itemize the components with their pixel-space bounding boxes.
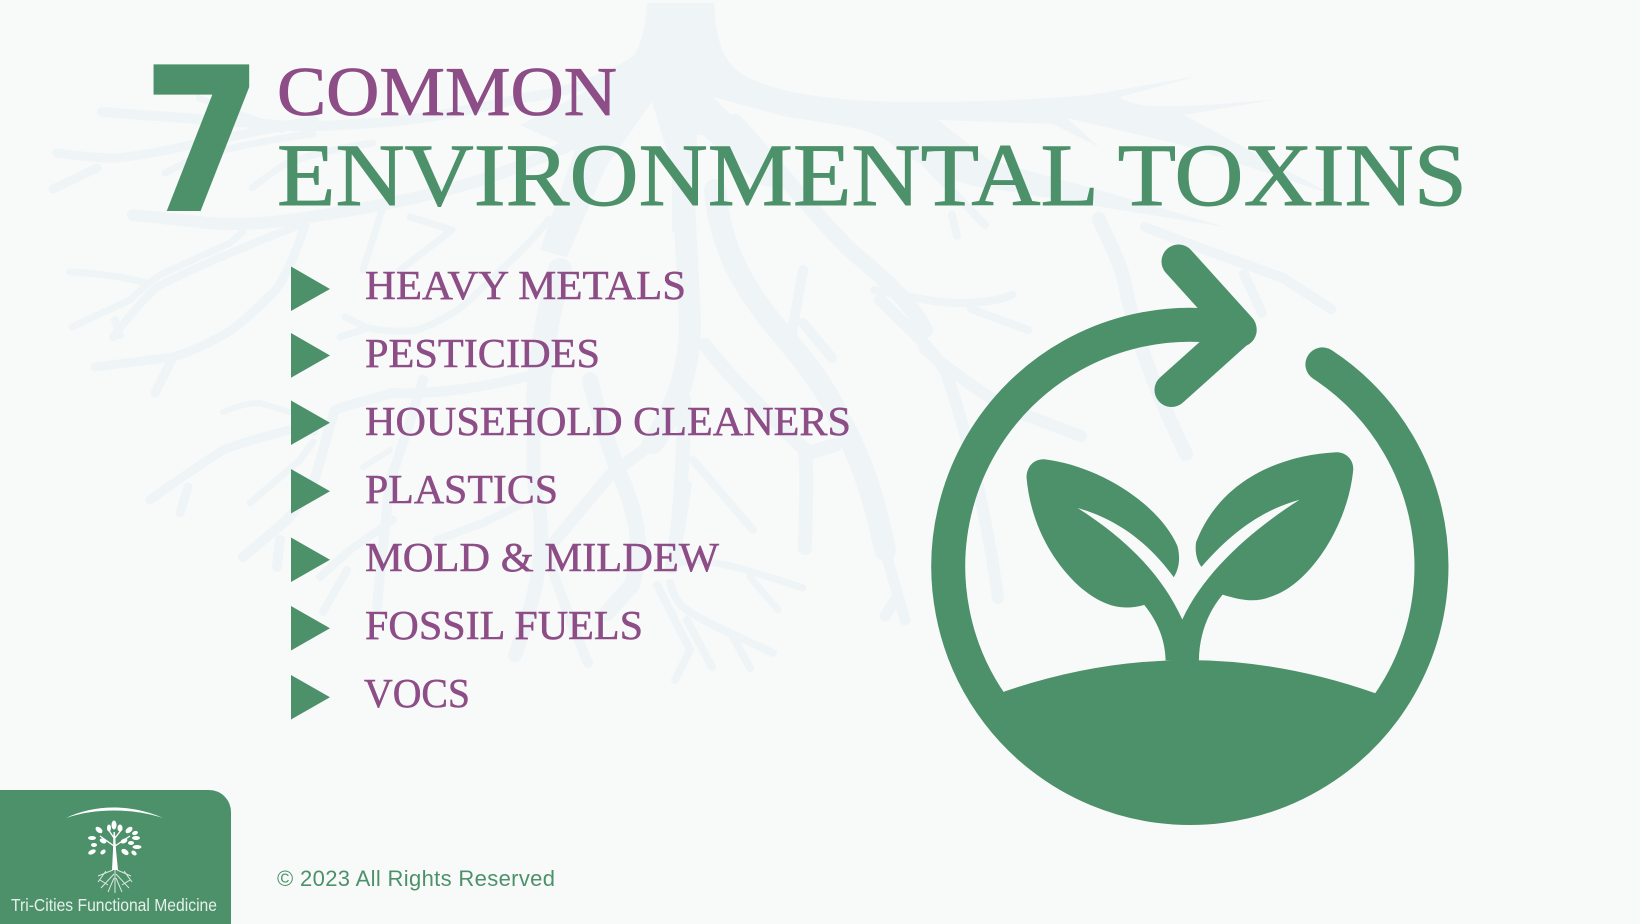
bullet: pesticides [291,333,330,378]
circular arrow ring [948,325,1431,808]
bullet: household cleaners [291,400,330,445]
left leaf and stem [1026,459,1199,661]
logo tree [87,820,142,870]
bullet: heavy metals [291,266,330,311]
logo background [0,790,231,924]
item: pesticides: PESTICIDES [365,330,600,376]
arrow head [1172,262,1240,390]
logo roots [98,869,132,893]
bullet: vocs [291,675,330,720]
item: mold and mildew: MOLD & MILDEW [365,534,719,580]
item: household cleaners: HOUSEHOLD CLEANERS [365,398,851,444]
item: heavy metals: HEAVY METALS [365,262,686,308]
logo arc [66,808,163,818]
item: plastics: PLASTICS [365,466,558,512]
right leaf and stem [1166,452,1353,661]
big number 7: 7 [144,27,261,257]
toxin list [291,262,851,720]
item: fossil fuels: FOSSIL FUELS [365,602,643,648]
item: vocs: VOCS [364,670,470,716]
icon: sprout inside circular arrow [948,262,1431,808]
bullet: mold and mildew [291,538,330,582]
title line: common: COMMON [277,54,617,131]
bullet: fossil fuels [291,606,330,650]
copyright: © 2023 All Rights Reserved [277,866,555,891]
title [144,27,1467,257]
logo name: Tri-Cities Functional Medicine [11,895,217,915]
soil mound [996,660,1386,801]
bullet: plastics [291,469,330,514]
title line: environmental toxins: ENVIRONMENTAL TOXINS [277,127,1467,225]
logo panel [0,790,231,924]
background: faded tree roots [53,3,1331,680]
